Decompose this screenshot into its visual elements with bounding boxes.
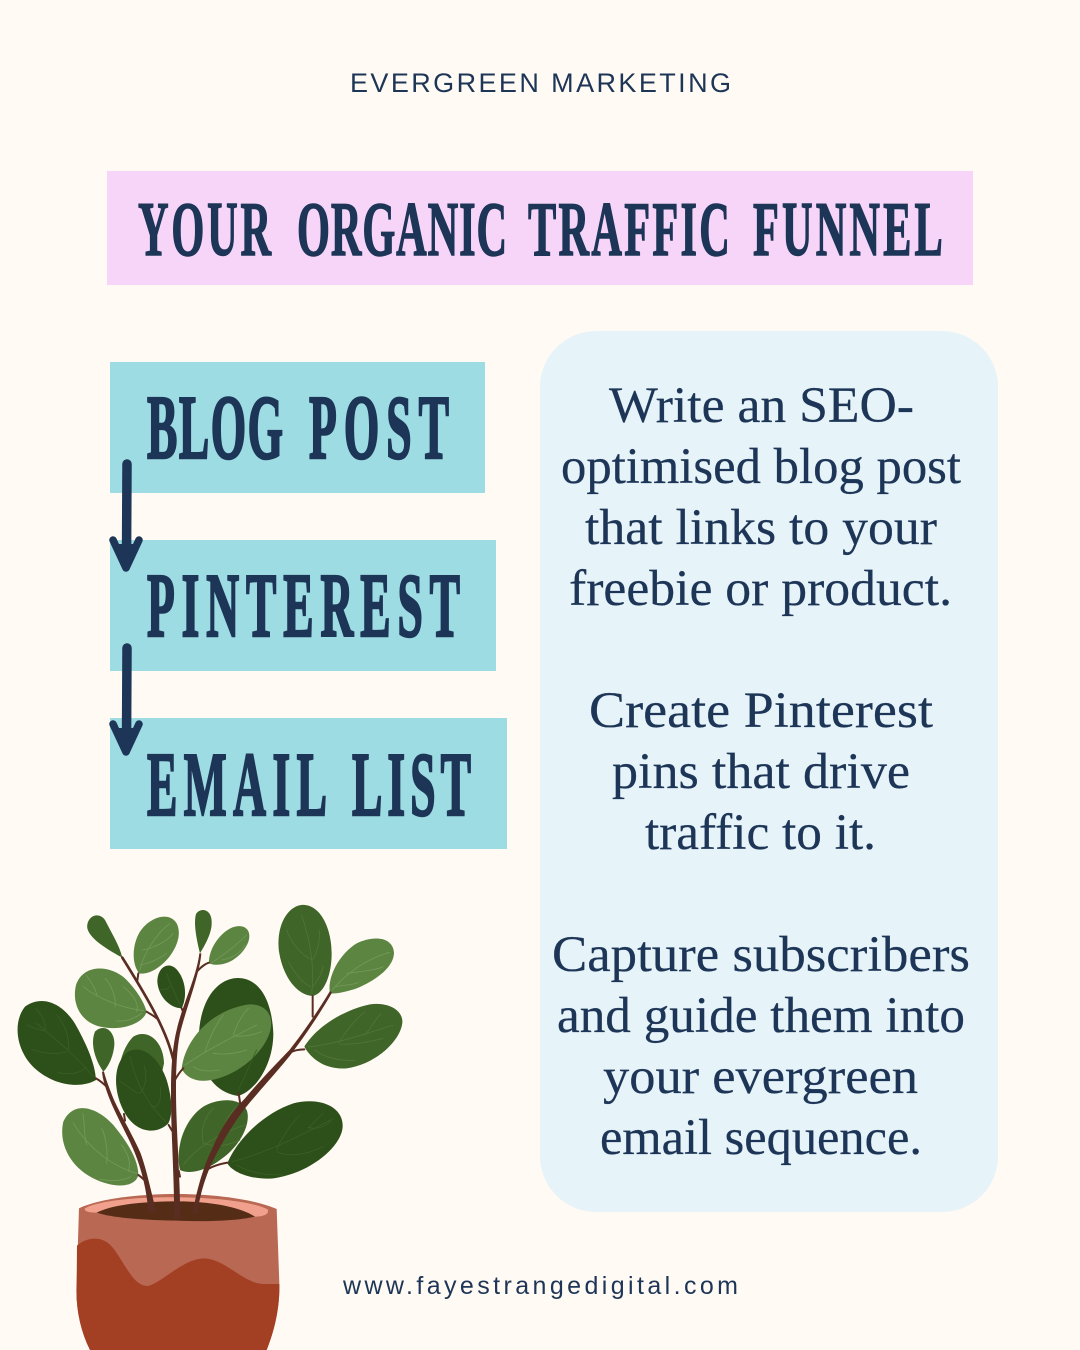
funnel step: email list	[110, 718, 507, 849]
funnel step: pinterest: PINTEREST	[147, 555, 460, 656]
title banner	[107, 171, 973, 285]
text block: blog post step	[561, 378, 961, 617]
title banner: YOUR	[138, 188, 272, 272]
funnel step: blog post	[110, 362, 485, 493]
text block: pinterest step: traffic to it.	[645, 805, 876, 861]
leaves behind stems	[18, 905, 402, 1185]
title banner: FUNNEL	[753, 188, 943, 272]
text block: blog post step: Write an SEO-	[609, 378, 914, 434]
funnel step: email list: LIST	[352, 734, 471, 835]
text block: blog post step: freebie or product.	[569, 561, 952, 617]
text block: pinterest step	[589, 683, 933, 861]
text block: pinterest step: pins that drive	[612, 744, 910, 800]
text block: email step: Capture subscribers	[552, 927, 970, 983]
eyebrow heading: EVERGREEN MARKETING	[350, 68, 731, 98]
text block: pinterest step: Create Pinterest	[589, 683, 933, 739]
funnel step: email list: EMAIL	[147, 734, 327, 835]
illustration: potted plant	[18, 905, 402, 1350]
funnel step: blog post: POST	[309, 377, 449, 478]
text block: email step	[552, 927, 970, 1166]
text block: email step: and guide them into	[557, 988, 965, 1044]
text block: email step: email sequence.	[600, 1110, 922, 1166]
title banner: ORGANIC	[297, 188, 507, 272]
pot	[76, 1194, 279, 1350]
leaf veins	[27, 915, 393, 1181]
funnel step: pinterest	[110, 540, 496, 671]
text block: email step: your evergreen	[603, 1049, 918, 1105]
title banner: TRAFFIC	[528, 188, 730, 272]
funnel step: blog post: BLOG	[147, 377, 283, 478]
panel: funnel explanation	[540, 331, 998, 1212]
arrow: blog post to pinterest	[113, 464, 139, 568]
arrow: pinterest to email list	[113, 648, 139, 752]
text block: blog post step: that links to your	[585, 500, 937, 556]
footer website: www.fayestrangedigital.com	[342, 1272, 738, 1300]
stems	[96, 953, 332, 1218]
text block: blog post step: optimised blog post	[561, 439, 961, 495]
